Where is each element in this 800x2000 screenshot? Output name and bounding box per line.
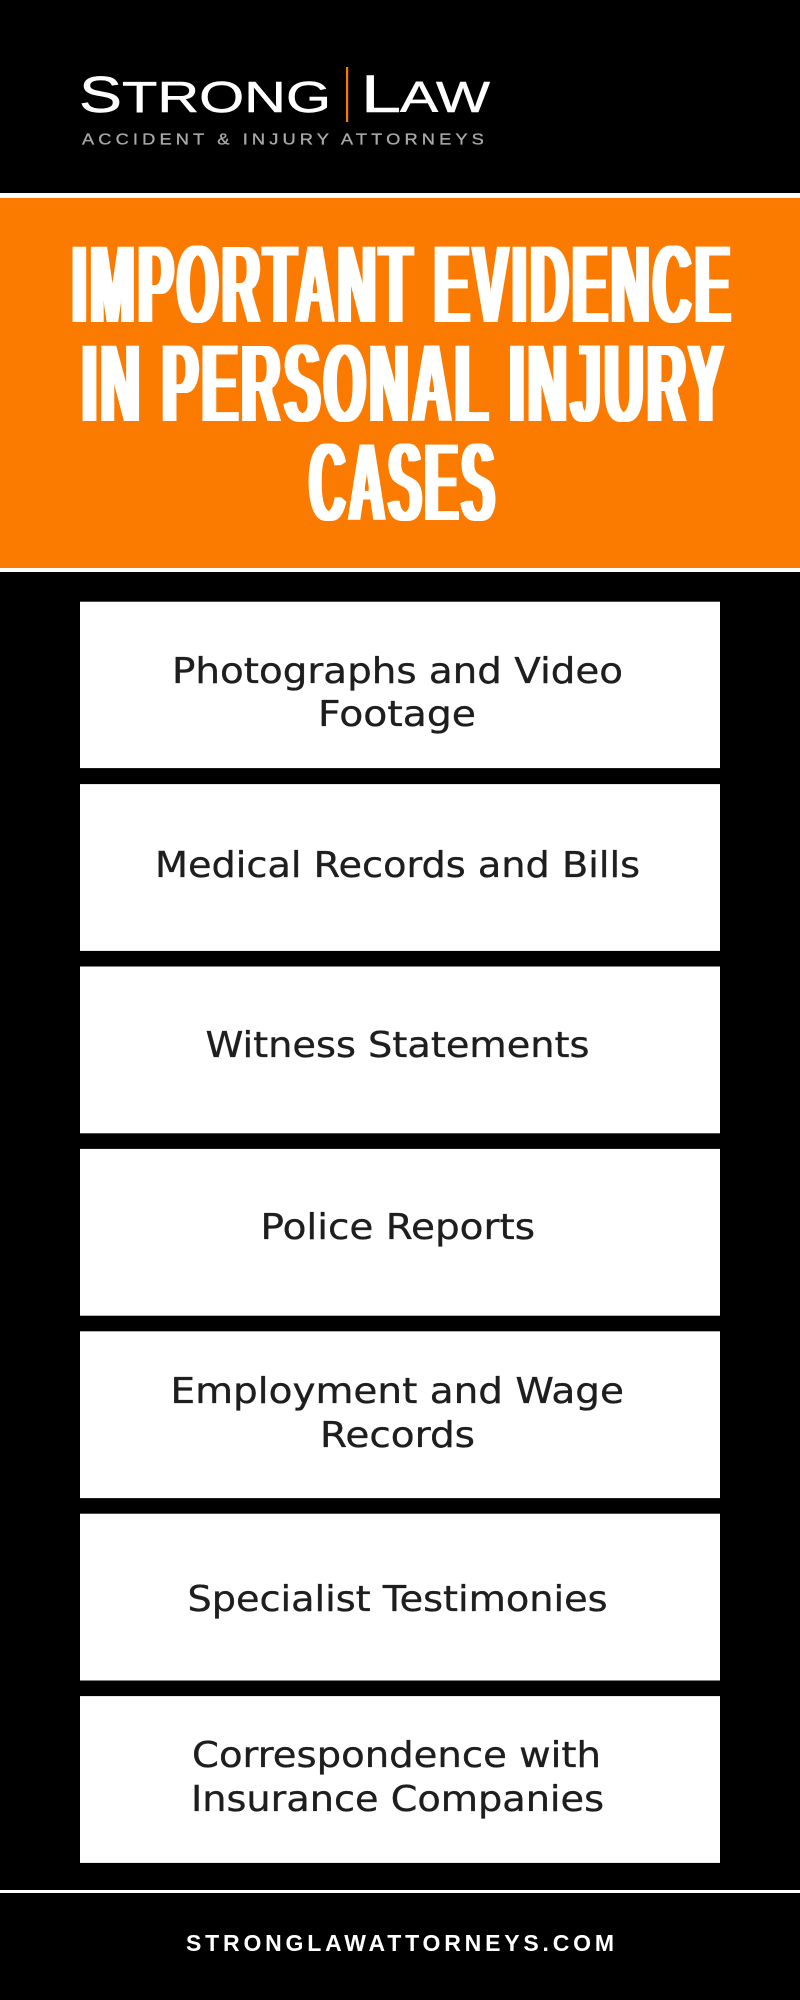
card: witness statements: Witness Statements	[206, 1025, 590, 1066]
logo: L	[361, 65, 401, 124]
footer website: STRONGLAWATTORNEYS.COM	[186, 1930, 614, 1956]
card: employment and wage records	[80, 1331, 720, 1498]
card: employment and wage records: Records	[320, 1415, 475, 1456]
card: police reports: Police Reports	[260, 1207, 535, 1248]
title	[72, 221, 734, 547]
logo: TRONG	[122, 73, 331, 122]
card: photographs and video footage	[80, 602, 720, 768]
card: specialist testimonies	[80, 1514, 720, 1680]
logo: ACCIDENT & INJURY ATTORNEYS	[82, 132, 488, 148]
title banner	[0, 193, 800, 572]
card: photographs and video footage: Footage	[318, 694, 476, 735]
card: correspondence with insurance companies: Insurance Companies	[191, 1779, 604, 1820]
card: police reports	[80, 1149, 720, 1316]
card: photographs and video footage: Photographs and Video	[172, 651, 623, 692]
card: medical records and bills	[80, 784, 720, 951]
logo: S	[79, 66, 122, 123]
card: employment and wage records: Employment and Wage	[170, 1371, 624, 1412]
logo	[79, 65, 491, 148]
logo: AW	[400, 73, 491, 122]
card: medical records and bills: Medical Records and Bills	[155, 845, 640, 886]
title: CASES	[310, 419, 498, 547]
card: specialist testimonies: Specialist Testimonies	[188, 1579, 608, 1620]
card: correspondence with insurance companies	[80, 1696, 720, 1863]
card: witness statements	[80, 966, 720, 1133]
card: correspondence with insurance companies: Correspondence with	[192, 1735, 601, 1776]
